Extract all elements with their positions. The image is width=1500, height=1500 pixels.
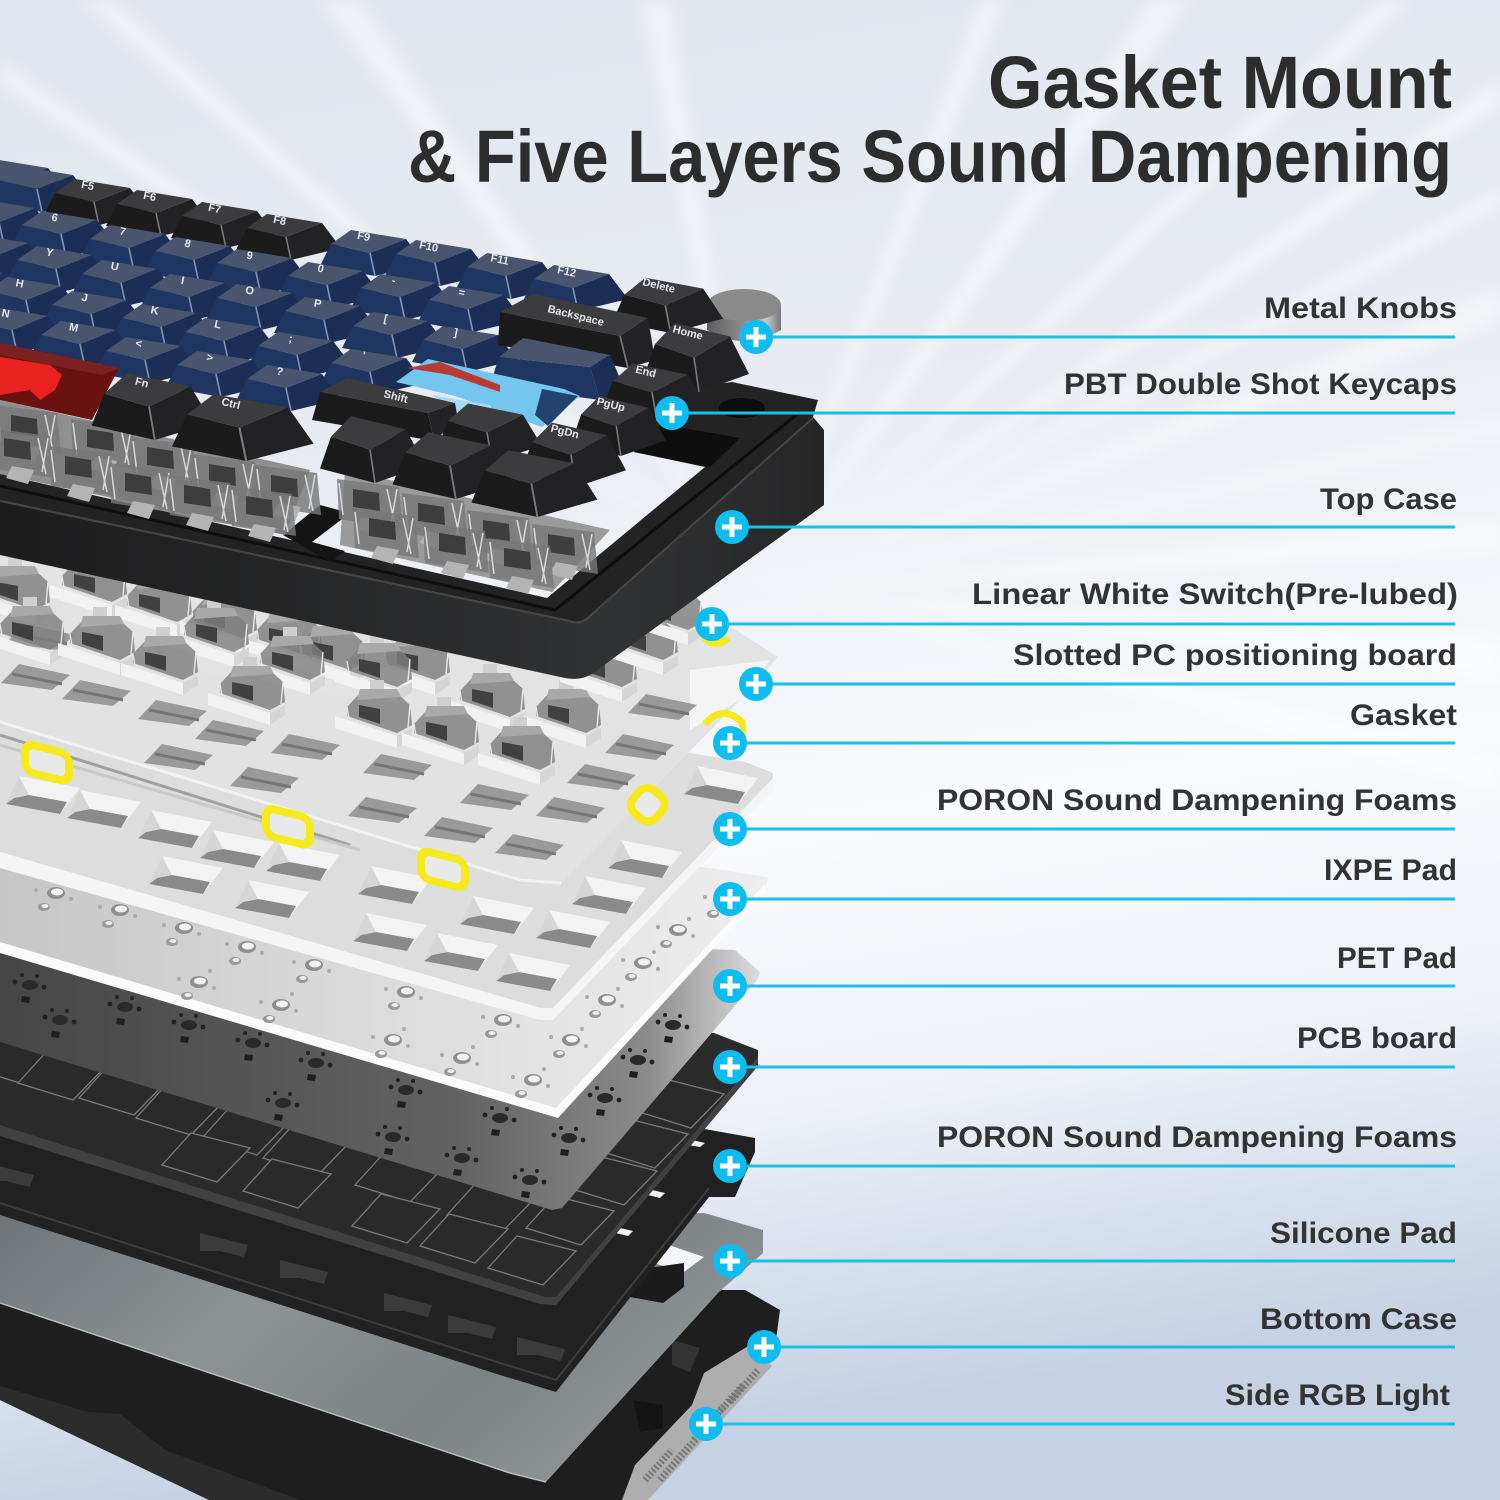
- callout: Metal Knobs: [739, 292, 1457, 354]
- key legends: P: [313, 297, 322, 311]
- key legends: Shift: [382, 388, 409, 406]
- callout: Silicone Pad: [713, 1217, 1457, 1278]
- key legends: H: [14, 277, 25, 291]
- key legends: O: [244, 284, 255, 298]
- callout: PORON Sound Dampening Foams upper: PORON Sound Dampening Foams: [937, 784, 1457, 817]
- artisan keycap: red: [0, 343, 119, 420]
- key legends: F9: [356, 230, 371, 244]
- key legends: ]: [453, 327, 459, 339]
- callout: Slotted PC positioning board: Slotted PC positioning board: [1013, 639, 1457, 672]
- key legends: PgDn: [549, 423, 580, 441]
- key legends: J: [80, 292, 89, 305]
- key legends: >: [205, 352, 214, 365]
- key legends: [: [383, 313, 389, 325]
- callout: Metal Knobs: Metal Knobs: [1264, 292, 1457, 325]
- key legends: M: [68, 321, 79, 335]
- callout: PBT Double Shot Keycaps: [655, 368, 1457, 430]
- top case: [0, 382, 824, 679]
- key legends: F12: [556, 264, 577, 280]
- upper switches: [0, 400, 610, 594]
- key legends: F5: [80, 179, 95, 193]
- layer: silicone pad: [0, 1213, 763, 1482]
- layer: PORON foam upper plate: [0, 640, 773, 1020]
- callout: PORON Sound Dampening Foams lower: [713, 1121, 1457, 1183]
- key legends: Delete: [641, 276, 676, 296]
- callout: Slotted PC positioning board: [739, 639, 1457, 701]
- key legends: L: [213, 318, 222, 332]
- callout: Bottom Case: [747, 1303, 1457, 1364]
- artisan keycap: blue: [396, 359, 580, 427]
- metal knob: [707, 289, 781, 341]
- key legends: PgUp: [595, 396, 626, 414]
- key legends: ?: [275, 365, 284, 379]
- key legends: F11: [489, 252, 510, 268]
- key legends: ;: [288, 333, 294, 345]
- callout: Linear White Switch: Linear White Switch(Pre-lubed): [972, 578, 1458, 611]
- key legends: U: [109, 260, 120, 274]
- key legends: F8: [272, 214, 287, 228]
- key legends: F6: [142, 190, 157, 204]
- callout: Silicone Pad: Silicone Pad: [1270, 1217, 1457, 1250]
- layer: PCB board: [0, 1000, 758, 1305]
- callout: Side RGB Light: Side RGB Light: [1225, 1379, 1450, 1412]
- shift key: [312, 378, 458, 441]
- key legends: 6: [50, 212, 59, 225]
- key legends: F10: [418, 239, 439, 255]
- callout: PCB board: PCB board: [1297, 1022, 1457, 1055]
- callout: IXPE Pad: [713, 854, 1457, 916]
- callout: PET Pad: PET Pad: [1337, 942, 1457, 975]
- layer: PORON foam lower: [0, 1100, 755, 1392]
- key legends: -: [391, 275, 397, 287]
- key legends: [0, 179, 704, 441]
- key legends: 7: [118, 226, 127, 239]
- callout: PORON Sound Dampening Foams lower: PORON Sound Dampening Foams: [937, 1121, 1457, 1154]
- callout: Linear White Switch: [695, 578, 1458, 641]
- title: [408, 41, 1452, 198]
- key legends: =: [457, 287, 466, 300]
- top case window: [634, 424, 740, 467]
- callout: PCB board: [713, 1022, 1457, 1084]
- callout: PORON Sound Dampening Foams upper: [713, 784, 1457, 846]
- enter key: [490, 338, 625, 400]
- key legends: 9: [245, 250, 254, 263]
- key legends: Backspace: [546, 303, 605, 329]
- key legends: 8: [183, 238, 192, 251]
- keycaps: [0, 159, 749, 517]
- knob hole: [719, 398, 765, 418]
- callout: Top Case: [715, 483, 1457, 544]
- layer: IXPE pad: [0, 760, 768, 1118]
- key legends: I: [180, 275, 185, 287]
- callout: Bottom Case: Bottom Case: [1260, 1303, 1457, 1336]
- layer: bottom case: [0, 1290, 780, 1500]
- backspace key: [498, 294, 655, 368]
- layer: PET pad: [0, 925, 760, 1210]
- key legends: K: [149, 304, 160, 318]
- key legends: N: [0, 307, 11, 321]
- key legends: F7: [207, 202, 222, 216]
- callout: Side RGB Light: [689, 1379, 1455, 1441]
- key legends: ': [361, 350, 367, 362]
- key legends: Ctrl: [220, 396, 241, 412]
- callout: PBT Double Shot Keycaps: PBT Double Shot Keycaps: [1064, 368, 1457, 401]
- key legends: End: [634, 364, 657, 380]
- key legends: <: [134, 338, 143, 351]
- layer: slotted PC positioning board: [0, 540, 778, 883]
- RGB diffuser strip: [622, 1345, 772, 1500]
- callout: PET Pad: [713, 942, 1457, 1003]
- key legends: Y: [45, 246, 55, 260]
- key legends: 0: [316, 263, 325, 276]
- callout: Gasket: [713, 699, 1457, 760]
- callout: IXPE Pad: IXPE Pad: [1324, 854, 1457, 887]
- callout: Top Case: Top Case: [1320, 483, 1457, 516]
- key legends: Home: [671, 324, 704, 343]
- callout: Gasket: Gasket: [1350, 699, 1457, 732]
- lower switches: [0, 549, 703, 785]
- title: Gasket Mount: [988, 41, 1452, 124]
- gasket rings: [25, 636, 743, 889]
- key legends: Fn: [134, 376, 150, 391]
